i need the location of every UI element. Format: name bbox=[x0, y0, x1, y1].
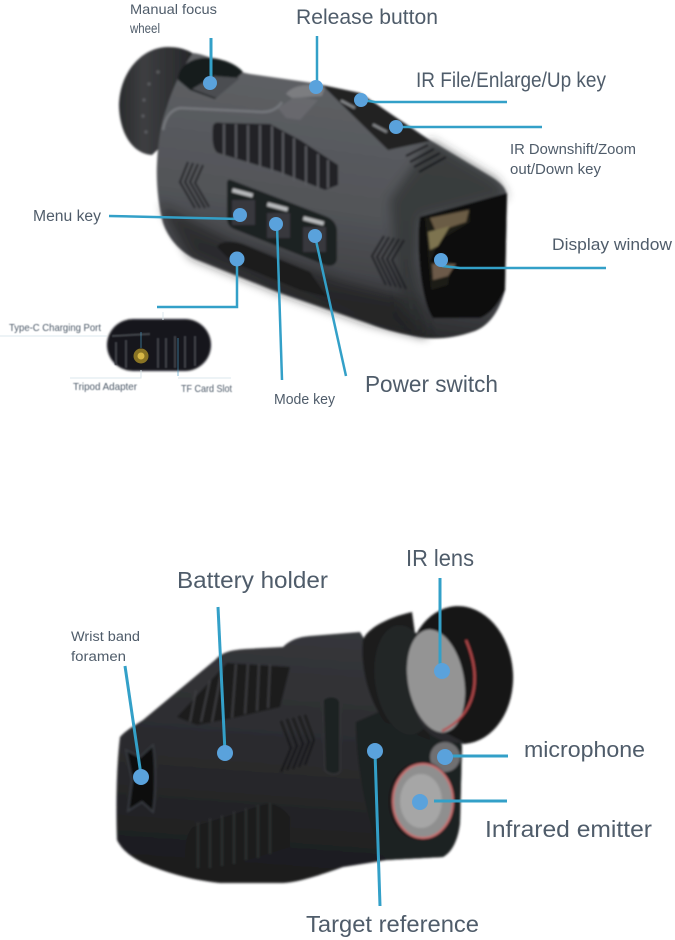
release button bbox=[286, 85, 325, 98]
callout: power switch: Power switch bbox=[365, 371, 498, 397]
main body bbox=[116, 632, 462, 883]
callout: manual focus wheel: wheel bbox=[129, 20, 160, 36]
top grip bbox=[177, 663, 290, 725]
callout: release button: Release button bbox=[296, 6, 438, 29]
callout: microphone bbox=[437, 737, 645, 765]
front panel bbox=[356, 705, 462, 860]
callout: battery holder: Battery holder bbox=[177, 567, 328, 593]
power button bbox=[303, 227, 326, 252]
label: type-c: Type-C Charging Port bbox=[9, 322, 101, 334]
callout: IR file key bbox=[354, 69, 606, 107]
left chevrons bbox=[180, 162, 209, 208]
main body bbox=[157, 53, 507, 338]
callout: mode key bbox=[269, 217, 335, 408]
callout: infrared emitter: Infrared emitter bbox=[485, 816, 652, 842]
callout: target reference bbox=[306, 743, 479, 937]
callout: mode key: Mode key bbox=[274, 391, 335, 408]
port capsule bbox=[107, 319, 211, 371]
mode button bbox=[267, 213, 290, 238]
infrared emitter bbox=[388, 761, 454, 841]
callout: display window: Display window bbox=[552, 235, 673, 254]
callout: IR downshift key bbox=[389, 120, 636, 178]
callout: target reference: Target reference bbox=[306, 911, 479, 937]
side grip bbox=[213, 122, 338, 190]
eyepiece bbox=[119, 47, 200, 155]
callout: manual focus wheel: Manual focus bbox=[130, 1, 217, 17]
IR lens bbox=[399, 625, 473, 737]
menu button bbox=[232, 200, 255, 225]
microphone bbox=[430, 742, 460, 772]
tripod socket bbox=[134, 348, 148, 364]
callout: display window bbox=[434, 235, 673, 268]
callout: menu key: Menu key bbox=[33, 208, 101, 225]
callout: battery holder bbox=[177, 567, 328, 761]
callout: menu key bbox=[33, 208, 247, 225]
callout: power switch bbox=[308, 229, 498, 397]
callout: IR file key: IR File/Enlarge/Up key bbox=[416, 69, 606, 92]
wrist band foramen bbox=[126, 745, 155, 812]
label: tf card: TF Card Slot bbox=[181, 383, 232, 395]
right chevrons bbox=[372, 236, 406, 289]
top right slots bbox=[406, 145, 446, 172]
callout: microphone: microphone bbox=[524, 737, 645, 762]
display image bbox=[425, 208, 470, 290]
button panel bbox=[227, 180, 337, 266]
callout: infrared emitter bbox=[412, 794, 652, 842]
inset: port detail bbox=[0, 312, 232, 395]
dark front end bbox=[390, 140, 507, 336]
callout: wrist band foramen bbox=[71, 629, 149, 785]
lower body shadow bbox=[160, 205, 427, 338]
callout: IR lens: IR lens bbox=[406, 545, 474, 571]
device: rear view monocular bbox=[119, 47, 507, 338]
focus ring bbox=[368, 621, 442, 739]
lens hood bbox=[402, 602, 518, 748]
callout: IR lens bbox=[406, 545, 474, 679]
callout: IR downshift key: IR Downshift/Zoom bbox=[510, 142, 636, 158]
bottom grip bbox=[185, 804, 290, 877]
callout: charging port connector bbox=[157, 252, 244, 307]
hood inner rim bbox=[412, 650, 465, 743]
bottom grip bbox=[217, 242, 327, 297]
device: front view monocular bbox=[116, 602, 518, 883]
strap slot bbox=[323, 696, 340, 774]
focus wheel recess bbox=[178, 58, 243, 99]
top key strip bbox=[322, 85, 430, 150]
focus wheel bbox=[192, 76, 240, 98]
facet highlight bbox=[278, 96, 318, 120]
callout: release button bbox=[296, 6, 438, 94]
callout: wrist band foramen: foramen bbox=[71, 649, 126, 664]
label: tripod: Tripod Adapter bbox=[73, 381, 137, 393]
lens barrel bbox=[362, 612, 430, 740]
collar highlight bbox=[163, 102, 282, 130]
callout: IR downshift key: out/Down key bbox=[510, 162, 602, 178]
callout: wrist band foramen: Wrist band bbox=[71, 629, 140, 644]
callout: manual focus wheel bbox=[129, 1, 217, 90]
chevrons bbox=[281, 715, 314, 772]
display hood bbox=[419, 193, 507, 318]
